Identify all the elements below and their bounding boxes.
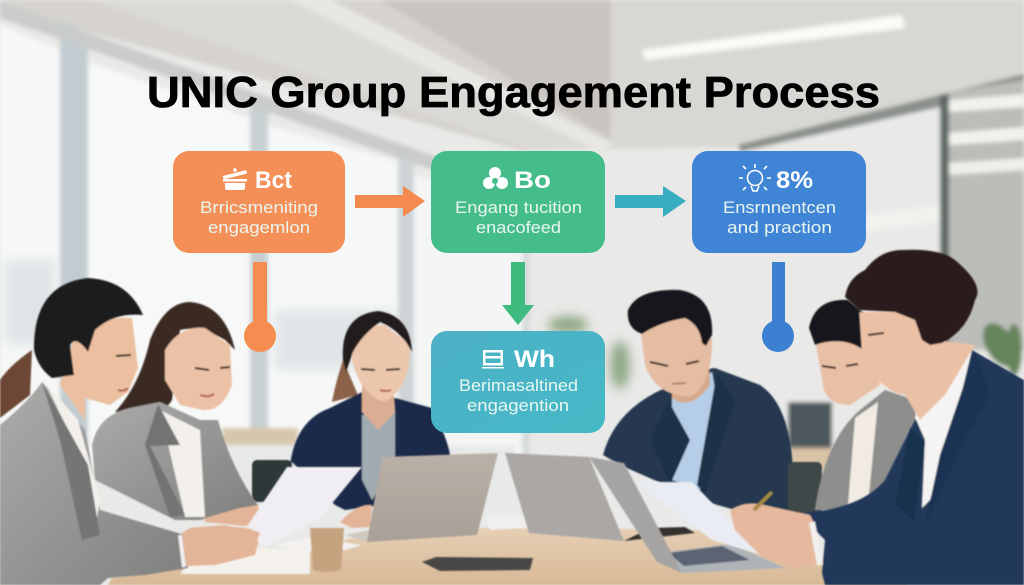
- person: woman in centre navy blazer: [252, 311, 450, 510]
- person 3 hand: [340, 505, 372, 528]
- text: orange body: engagemlon: [208, 218, 310, 237]
- person: woman in foreground with ponytail: [0, 278, 260, 585]
- icon: light bulb: [739, 164, 771, 191]
- icon: people: [483, 167, 508, 189]
- laptop: middle: [505, 453, 695, 541]
- person: man with dark suit: [603, 290, 795, 520]
- icon: list: [482, 350, 504, 368]
- text: blue body: and praction: [727, 218, 832, 237]
- text: orange body: [200, 198, 318, 237]
- heading: Bo: Bo: [514, 167, 551, 194]
- phone: [422, 557, 533, 571]
- arrow: orange to green: [355, 186, 425, 217]
- person: woman in grey blazer, right: [788, 300, 918, 514]
- arrow: green to teal: [502, 262, 534, 325]
- plants: [548, 316, 630, 389]
- text: teal body: engagention: [467, 396, 569, 415]
- text: orange body: Brricsmeniting: [200, 198, 318, 217]
- heading: Bct: Bct: [255, 167, 292, 194]
- laptops, cup and document props: [205, 453, 785, 573]
- hand: holding document: [205, 527, 260, 562]
- text: teal body: Berimasaltined: [459, 376, 578, 395]
- ceiling: [0, 0, 620, 150]
- laptop: right: [589, 457, 785, 573]
- person: woman with long brown hair: [92, 302, 262, 526]
- document: right: [635, 482, 762, 555]
- conference table: [108, 527, 907, 585]
- cup: [310, 528, 344, 572]
- heading: Wh: Wh: [514, 346, 555, 373]
- icon: pot: [223, 168, 247, 190]
- panel: green step: [431, 151, 605, 253]
- text: green body: enacofeed: [476, 218, 561, 237]
- desk items: [180, 516, 533, 574]
- papers near laptop: [275, 537, 362, 552]
- panel: blue step: [692, 151, 866, 253]
- text: blue body: [723, 198, 836, 237]
- notebook: [180, 548, 310, 574]
- text: green body: [455, 198, 582, 237]
- right wall: [530, 96, 940, 470]
- person: man in foreground navy suit: [730, 250, 1024, 585]
- connector: orange stem: [244, 262, 276, 352]
- document: left: [248, 467, 362, 548]
- window frames: [60, 20, 88, 470]
- panel: teal step: [431, 331, 605, 433]
- windows: [0, 25, 60, 470]
- heading: 8%: 8%: [776, 167, 813, 194]
- text: blue body: Ensrnnentcen: [723, 198, 836, 217]
- laptop: centre: [345, 453, 498, 542]
- arrow: green to blue: [615, 186, 686, 217]
- title: UNIC Group Engagement Process: [147, 68, 880, 117]
- connector: blue stem: [762, 262, 794, 352]
- sill and desk: [222, 428, 298, 445]
- panel: orange step: [173, 151, 345, 253]
- text: teal body: [459, 376, 578, 415]
- text: green body: Engang tucition: [455, 198, 582, 217]
